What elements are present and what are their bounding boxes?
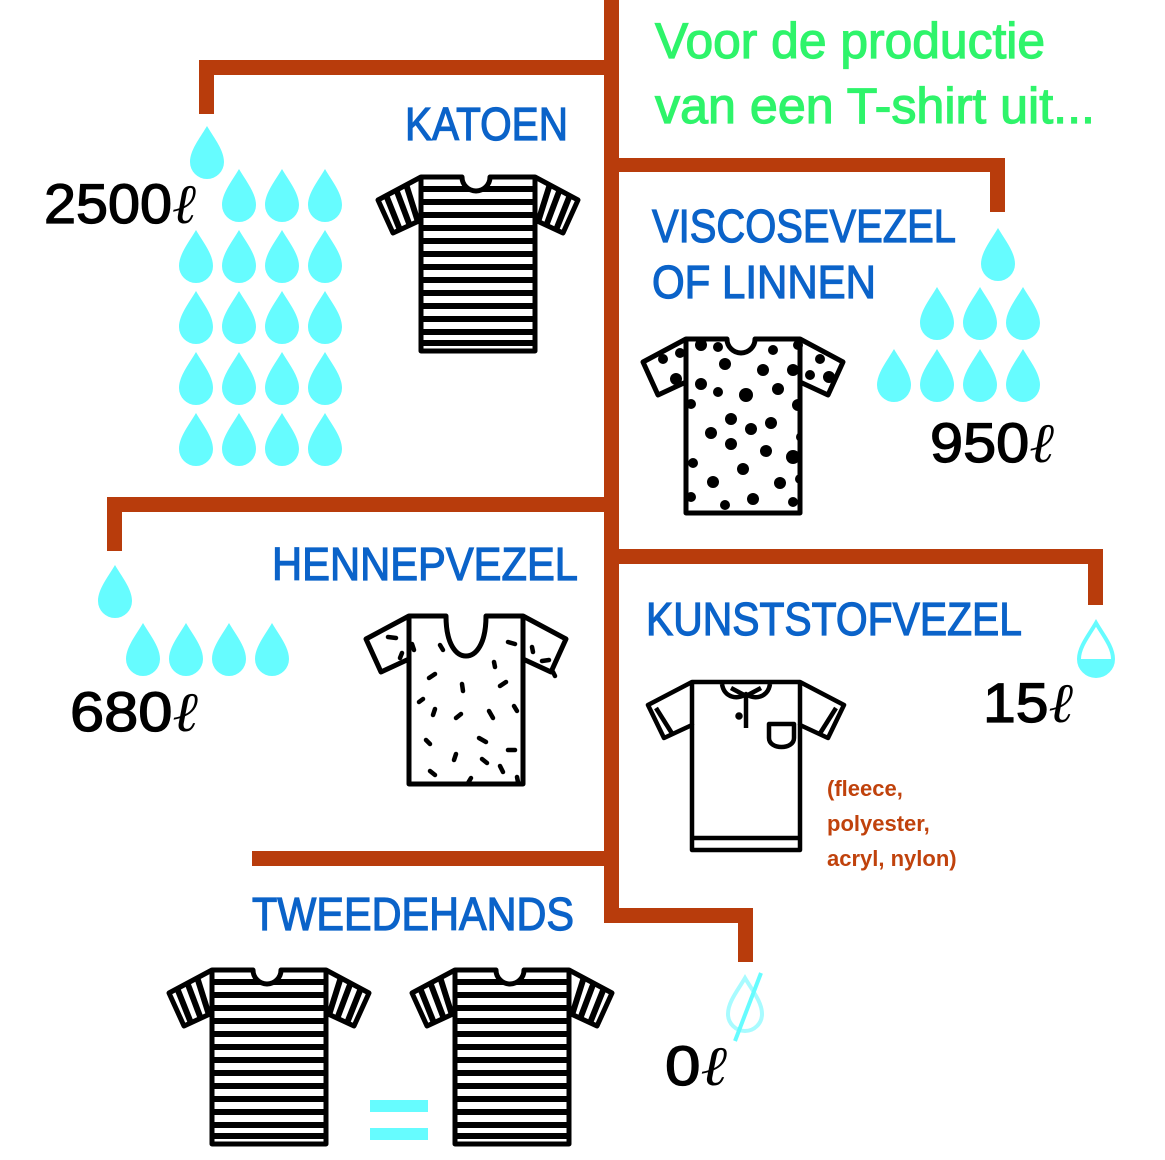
heading: viscose: VISCOSEVEZEL — [652, 200, 956, 252]
icon: outline drop 15 — [1079, 623, 1113, 676]
heading: kunststofvezel: KUNSTSTOFVEZEL — [646, 593, 1022, 645]
shirt: dotted — [643, 339, 843, 513]
icon: crossed drop — [728, 973, 762, 1041]
number: 2500: 2500ℓ — [44, 172, 197, 236]
heading: katoen: KATOEN — [405, 98, 568, 150]
text: synthetic examples: acryl, nylon) — [827, 846, 957, 871]
drops: viscose — [877, 228, 1040, 402]
number: 680: 680ℓ — [70, 680, 199, 744]
icon: equals — [370, 1100, 428, 1140]
number: 0: 0ℓ — [665, 1034, 728, 1098]
pipes — [107, 0, 1103, 962]
drops: hennep — [98, 565, 289, 676]
number: 15: 15ℓ — [983, 671, 1074, 735]
drops: katoen — [179, 126, 342, 466]
text: synthetic examples: (fleece, — [827, 776, 903, 801]
shirts: second hand — [169, 970, 369, 1144]
heading: viscose — [652, 200, 956, 308]
number: 950: 950ℓ — [930, 411, 1055, 475]
text: synthetic examples — [827, 776, 957, 871]
title: van een T-shirt uit... — [655, 78, 1095, 134]
shirt: katoen — [378, 177, 578, 351]
title — [655, 13, 1095, 134]
text: synthetic examples: polyester, — [827, 811, 930, 836]
title: Voor de productie — [655, 13, 1045, 69]
heading: viscose: OF LINNEN — [652, 256, 876, 308]
shirt: polo — [648, 682, 844, 850]
heading: hennepvezel: HENNEPVEZEL — [272, 538, 578, 590]
shirt: hemp — [366, 616, 566, 784]
heading: tweedehands: TWEEDEHANDS — [252, 888, 574, 940]
